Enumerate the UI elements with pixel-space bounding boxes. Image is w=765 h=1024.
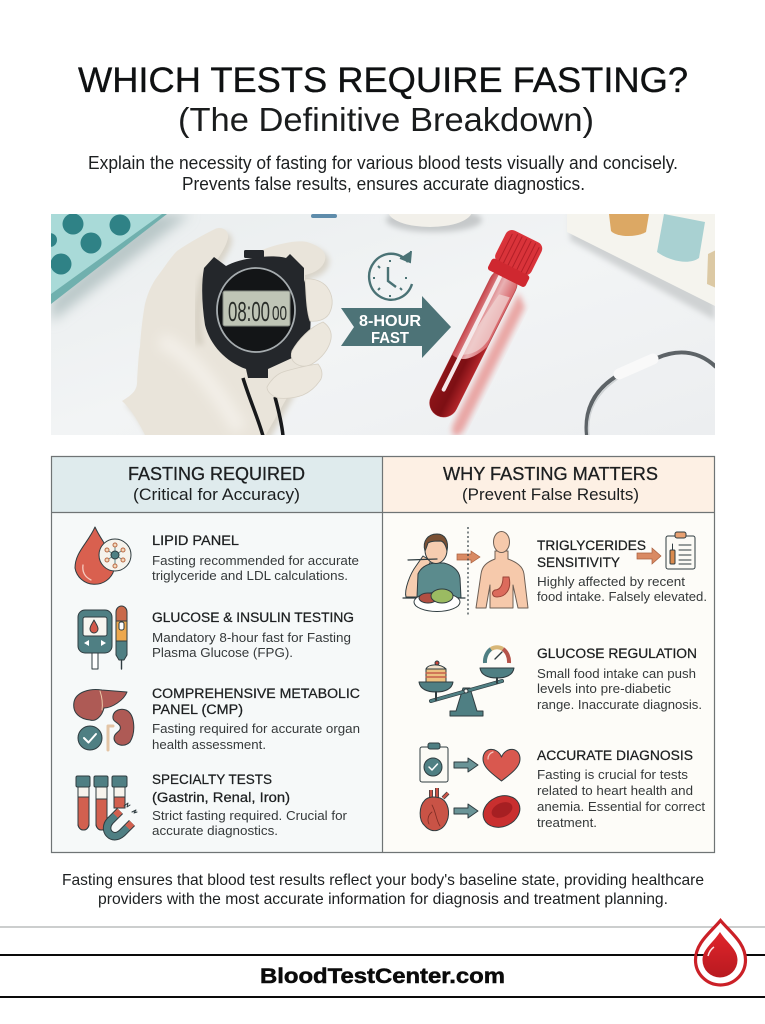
summary text: providers with the most accurate information for diagnosis and treatment planning. [98,891,668,908]
panel: comparison table [52,456,714,852]
text: glucose and insulin testing [152,610,354,660]
arrow: 8-hour fast [341,296,451,358]
text: glucose regulation: GLUCOSE REGULATION [537,646,697,661]
gloved hand [122,228,329,449]
icon: body with stomach [476,532,528,608]
icon: glucose meter and pen [78,606,127,669]
stopwatch cord [243,378,283,436]
teal well tray [43,214,190,322]
icon: man eating a meal [403,534,465,612]
icon: clipboard check to heart [420,743,520,782]
title: (The Definitive Breakdown) [178,101,594,138]
text: glucose regulation: range. Inaccurate diagnosis. [537,697,702,712]
text: comprehensive metabolic panel: COMPREHENSIVE METABOLIC [152,686,360,701]
arrow: eating to body [457,551,480,563]
icon: tubes and magnet [76,776,137,836]
stopwatch [202,250,311,378]
icon: anatomical heart to red blood cell [420,788,525,833]
icon: scale with cake and gauge [419,647,514,716]
glove fingers [267,279,332,398]
intro text [88,153,678,194]
text: specialty tests: accurate diagnostics. [152,823,278,838]
text: accurate diagnosis [537,748,705,830]
text: triglycerides sensitivity: SENSITIVITY [537,555,620,570]
icon: liver and kidney [74,690,134,750]
text: specialty tests: (Gastrin, Renal, Iron) [152,790,290,805]
text: triglycerides sensitivity: food intake. Falsely elevated. [537,589,707,604]
text: specialty tests [152,772,348,838]
text: lipid panel [152,533,359,583]
icon: lipid drop [75,527,131,584]
text: comprehensive metabolic panel: Fasting required for accurate organ [152,721,360,736]
white jar [311,214,484,234]
text: accurate diagnosis: treatment. [537,815,597,830]
panel: fasting required header: FASTING REQUIRED [128,464,305,484]
stopwatch: 08:00 [228,296,270,327]
text: accurate diagnosis: related to heart health and [537,783,693,798]
stopwatch: 00 [272,303,287,325]
arrow: 8-hour fast: FAST [371,330,409,347]
text: lipid panel: LIPID PANEL [152,533,240,548]
title [78,61,688,138]
footer brand: BloodTestCenter.com [260,965,505,988]
text: comprehensive metabolic panel [152,686,360,752]
text: lipid panel: triglyceride and LDL calculations. [152,568,348,583]
vial rack [567,214,716,320]
stethoscope [586,352,716,436]
summary text [62,872,704,908]
text: glucose and insulin testing: Mandatory 8-hour fast for Fasting [152,630,351,645]
text: glucose regulation: levels into pre-diabetic [537,681,672,696]
text: specialty tests: Strict fasting required. Crucial for [152,808,348,823]
panel: why fasting matters header [382,456,714,512]
title: WHICH TESTS REQUIRE FASTING? [78,61,688,100]
hero photo: stopwatch to blood tube [51,214,715,435]
blood collection tube [429,230,542,435]
text: glucose and insulin testing: GLUCOSE & INSULIN TESTING [152,610,354,625]
icon: report clipboard [666,532,695,569]
intro text: Explain the necessity of fasting for various blood tests visually and concisely. [88,153,678,173]
text: glucose and insulin testing: Plasma Glucose (FPG). [152,645,293,660]
text: specialty tests: SPECIALTY TESTS [152,772,272,787]
panel: why fasting matters header: (Prevent False Results) [462,486,639,504]
arrow: triglycerides to report [637,548,661,564]
text: triglycerides sensitivity [537,538,707,604]
intro text: Prevents false results, ensures accurate diagnostics. [182,174,585,194]
text: comprehensive metabolic panel: health assessment. [152,737,266,752]
arrow: 8-hour fast: 8-HOUR [359,313,421,330]
text: glucose regulation: Small food intake can push [537,666,696,681]
panel: fasting required header: (Critical for Accuracy) [133,486,300,504]
text: triglycerides sensitivity: TRIGLYCERIDES [537,538,646,553]
panel: fasting required header [52,456,382,512]
text: glucose regulation [537,646,702,712]
text: triglycerides sensitivity: Highly affected by recent [537,574,685,589]
summary text: Fasting ensures that blood test results reflect your body's baseline state, providing healthcare [62,872,704,889]
text: accurate diagnosis: anemia. Essential for correct [537,799,705,814]
icon: blood drop logo [696,920,746,985]
text: accurate diagnosis: ACCURATE DIAGNOSIS [537,748,693,763]
panel: why fasting matters header: WHY FASTING MATTERS [443,464,658,484]
text: accurate diagnosis: Fasting is crucial for tests [537,767,689,782]
icon: clock [369,251,412,300]
text: lipid panel: Fasting recommended for accurate [152,553,359,568]
text: comprehensive metabolic panel: PANEL (CMP) [152,702,243,717]
